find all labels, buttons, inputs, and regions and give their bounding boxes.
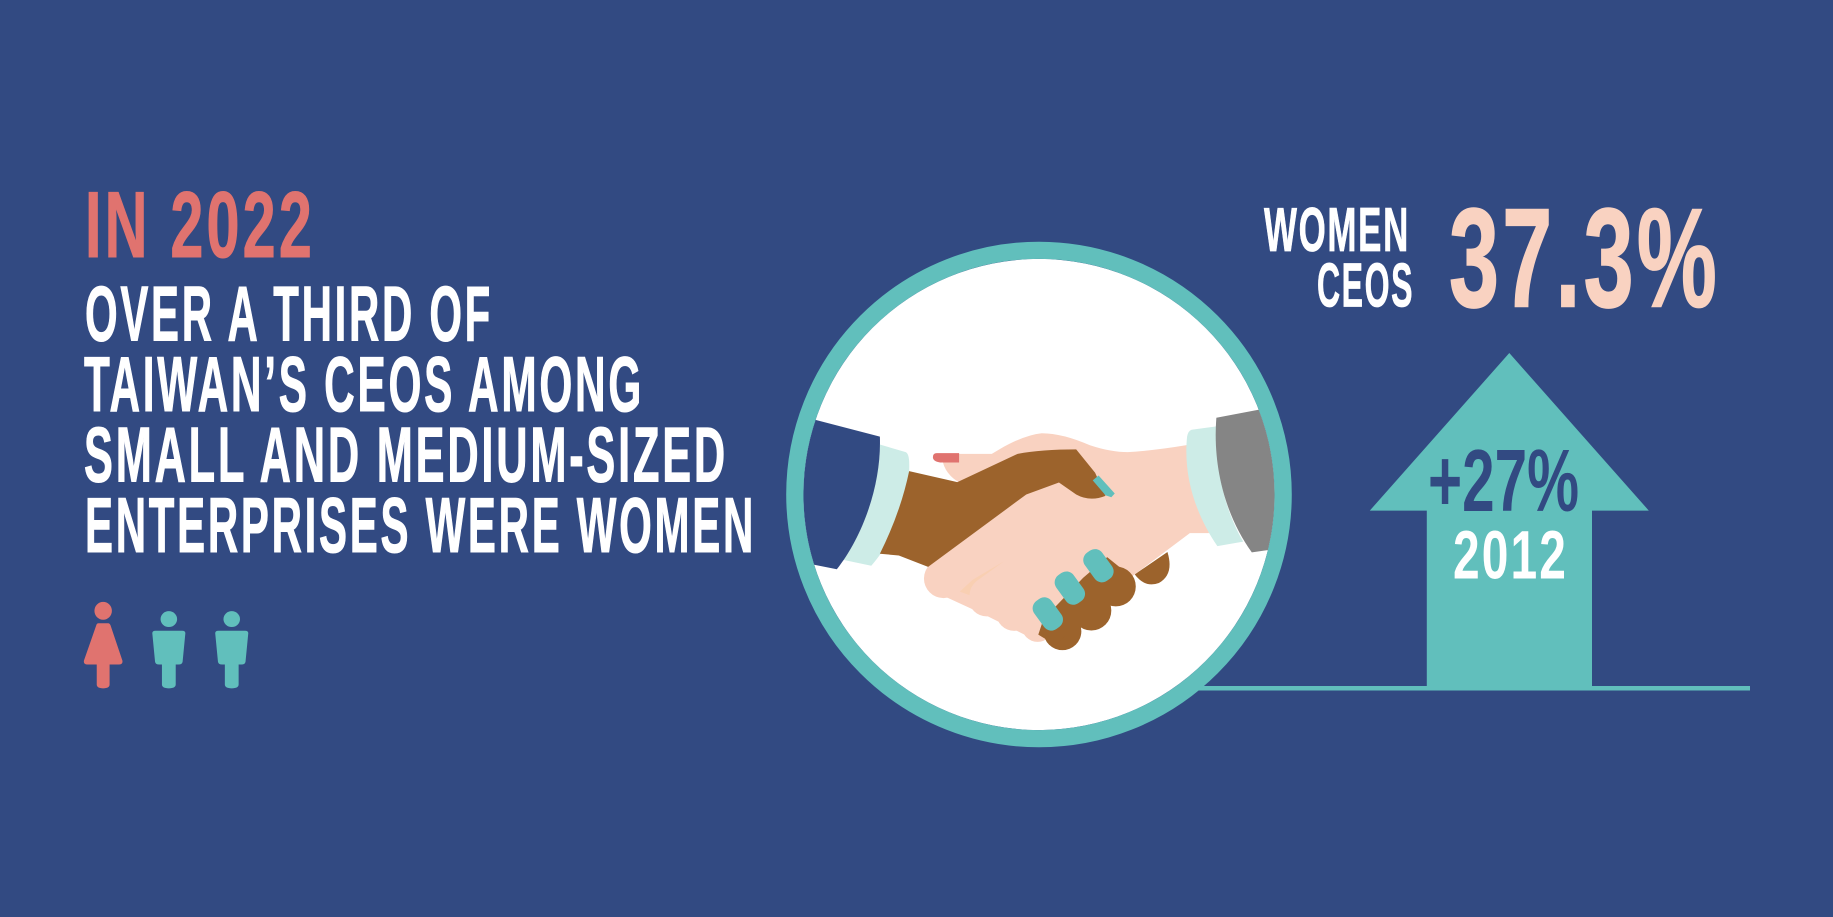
right sleeve [1216,410,1274,552]
brown arm and thumb [880,449,1105,567]
arrow label: +27%: +27% [1428,431,1579,530]
red nail [933,453,959,462]
heading: in 2022: IN 2022 [85,172,315,277]
circle ring [795,250,1283,739]
up arrow shape [1370,353,1649,686]
headline text block: ENTERPRISES WERE WOMEN [85,481,756,569]
brown fingers [1038,557,1136,650]
label: women ceos [1264,196,1414,320]
arrow label: 2012: 2012 [1453,516,1568,594]
left sleeve [804,420,880,570]
left cuff [839,444,909,566]
handshake circle [794,250,1290,739]
brown pinky behind hand [1135,552,1170,584]
headline text block: OVER A THIRD OF [85,270,493,358]
baseline under arrow [1190,686,1750,690]
headline text block: SMALL AND MEDIUM-SIZED [84,410,728,498]
icon: woman [84,602,122,688]
infographic canvas [84,191,1750,748]
label: women ceos: CEOS [1317,252,1414,320]
icon: man [152,611,185,688]
icon: man [215,611,248,688]
headline text block: TAIWAN’S CEOS AMONG [84,340,644,428]
peach hand [924,433,1214,642]
label: women ceos: WOMEN [1264,196,1410,265]
left nails [1029,476,1117,634]
icons: one woman and two men [84,602,248,688]
right cuff [1186,426,1243,546]
headline text block [84,270,756,569]
thumb crease [960,561,1004,595]
